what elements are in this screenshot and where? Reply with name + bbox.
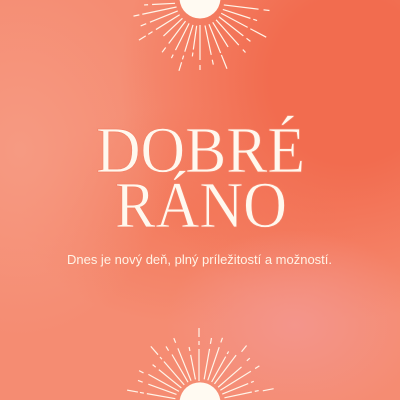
title	[96, 114, 305, 242]
subtitle text: Dnes je nový deň, plný príležitostí a možností.	[67, 252, 332, 267]
icon: bottom sun with rays	[127, 328, 274, 400]
title: RÁNO	[115, 169, 287, 242]
icon: top sun with rays	[133, 0, 269, 71]
title: DOBRÉ	[96, 114, 305, 187]
